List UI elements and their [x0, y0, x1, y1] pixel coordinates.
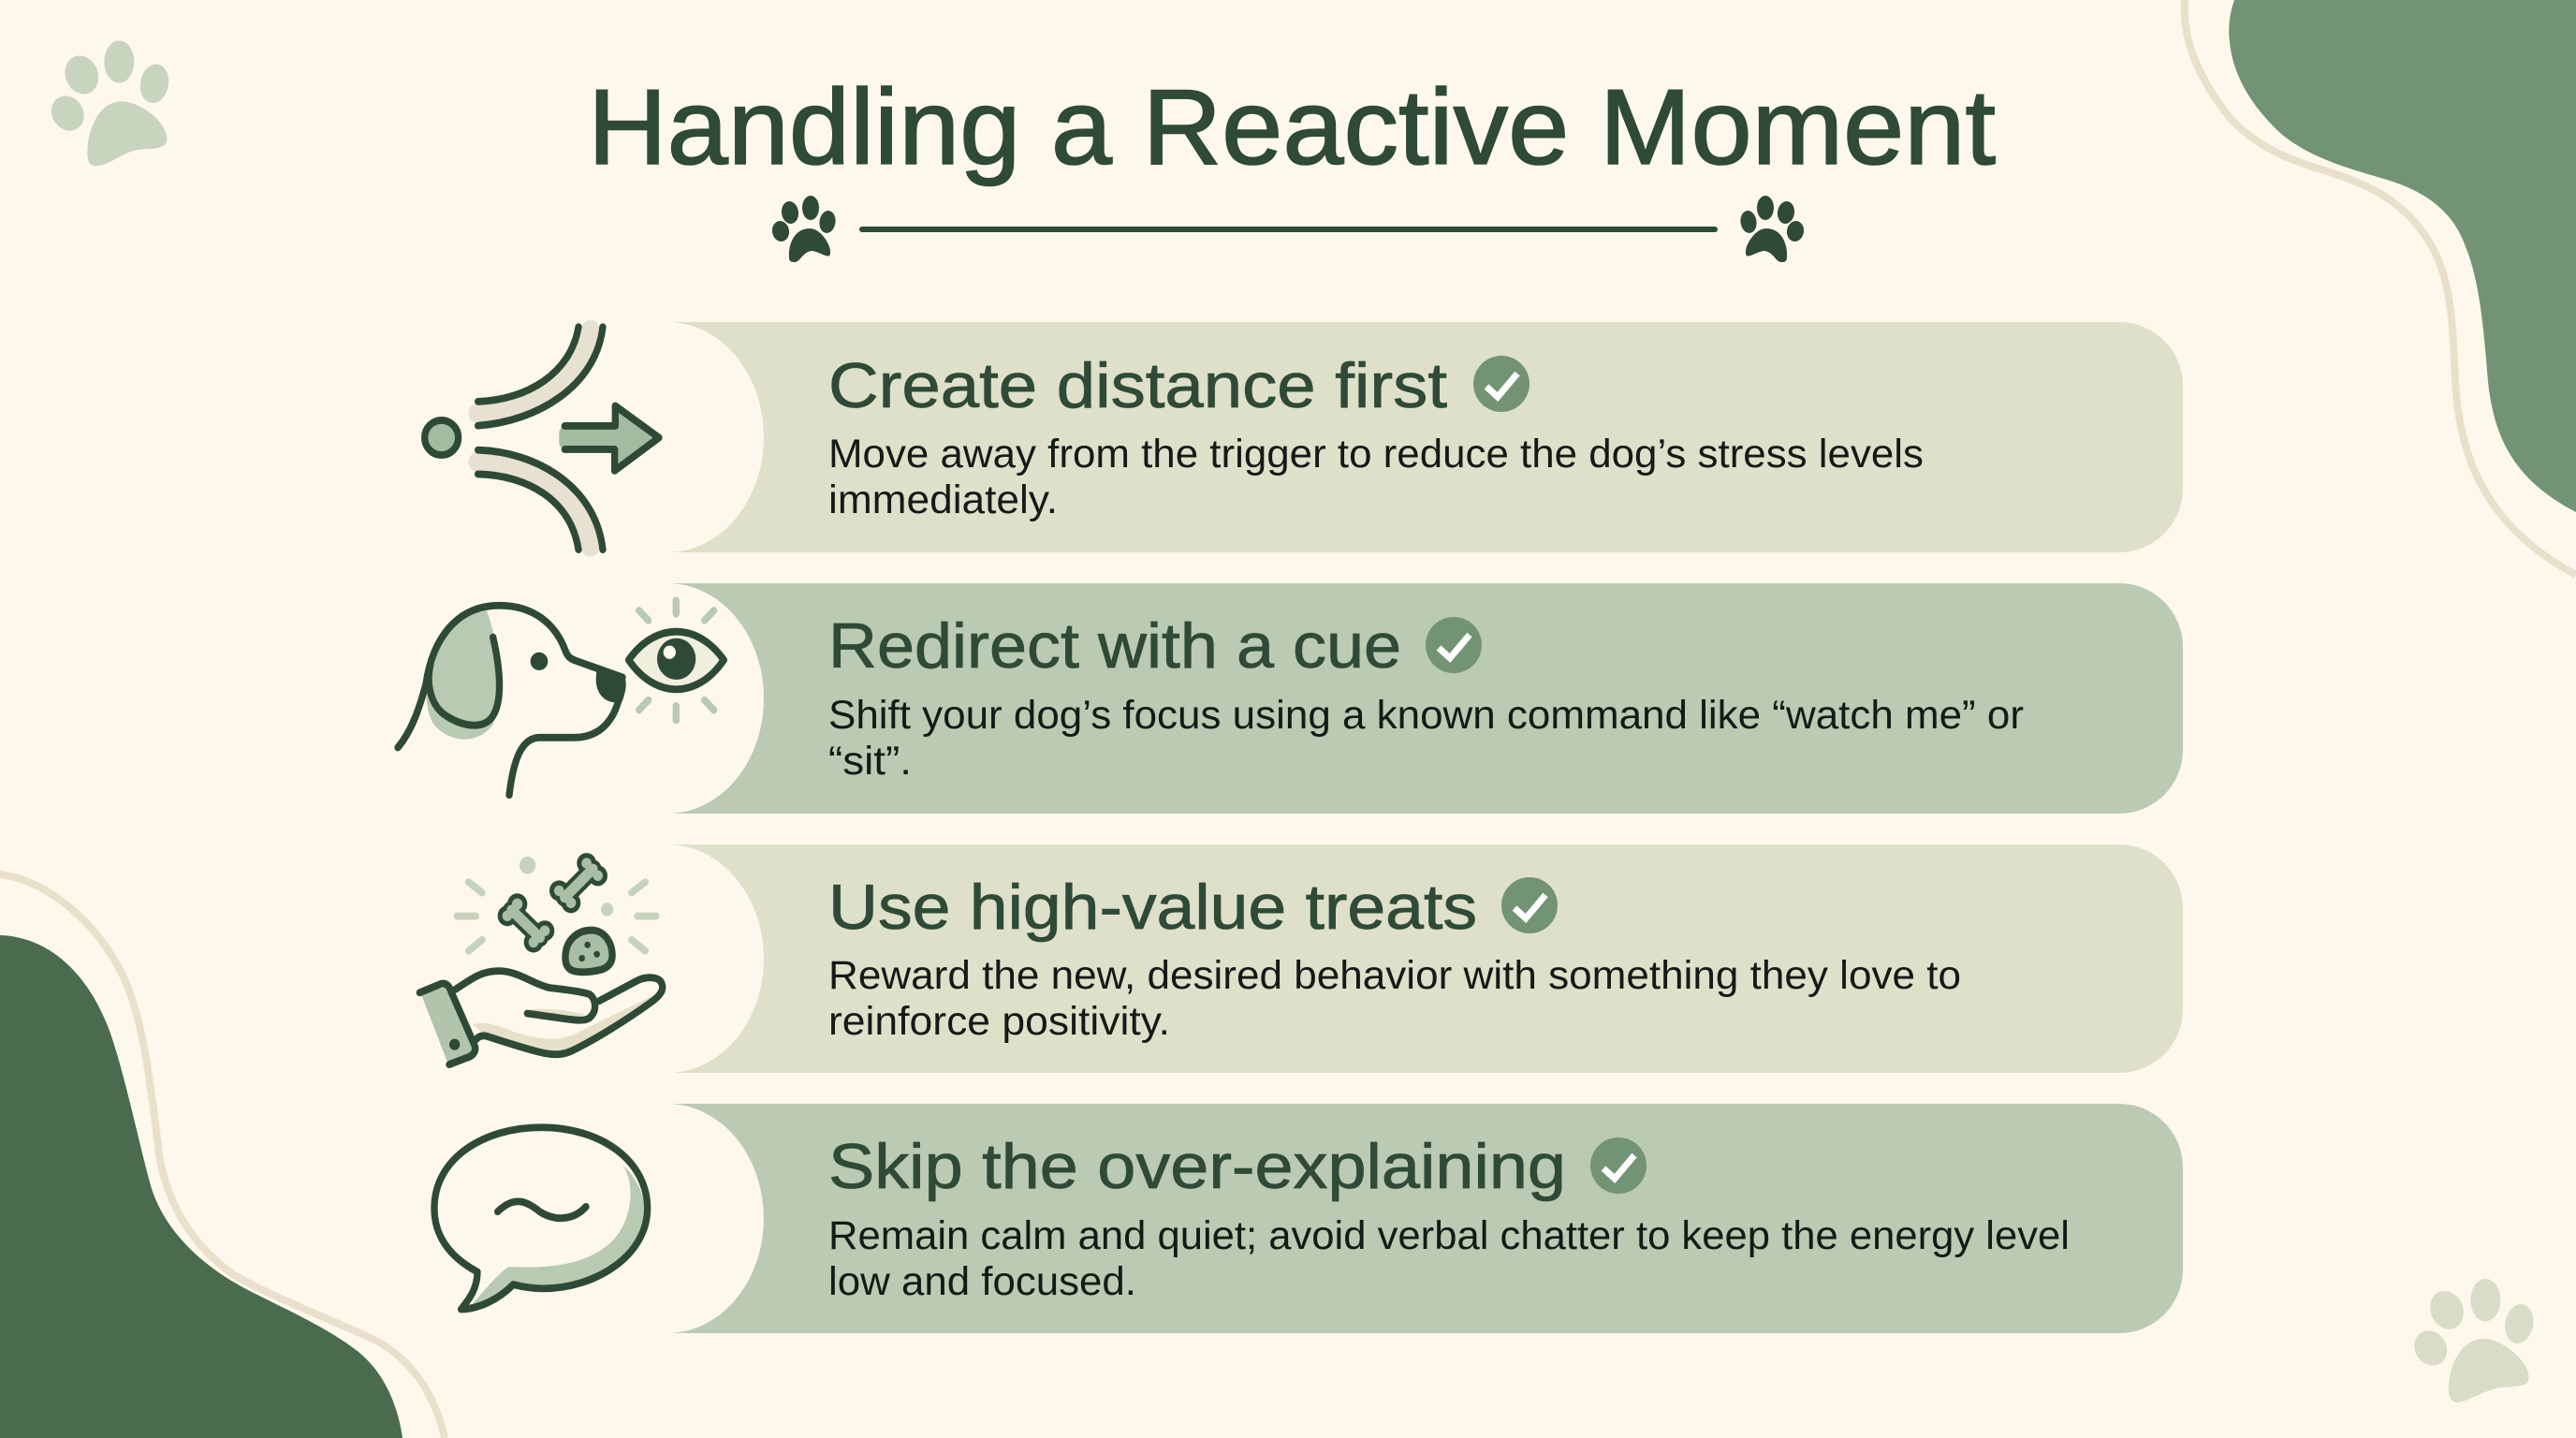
- blob: top right corner: [2185, 0, 2576, 575]
- icon: speech bubble: [434, 1127, 648, 1310]
- icon: moving away arrow: [425, 327, 659, 550]
- heading: Use high-value treats: [828, 872, 1477, 943]
- body text: Reward the new, desired behavior with something they love to: [828, 953, 1961, 998]
- icon: hand with treats: [419, 853, 663, 1064]
- icon: check: [1590, 1137, 1647, 1194]
- panel: skip the over-explaining: [434, 1104, 2183, 1333]
- panel: redirect with a cue: [398, 583, 2183, 814]
- title: Handling a Reactive Moment: [588, 68, 1996, 187]
- icon: check: [1501, 877, 1558, 933]
- panel: create distance first: [425, 322, 2183, 552]
- body text: Remain calm and quiet; avoid verbal chatter to keep the energy level: [828, 1213, 2070, 1258]
- panel: use high-value treats: [419, 844, 2183, 1073]
- body text: immediately.: [828, 477, 1058, 522]
- icon: check: [1473, 356, 1530, 412]
- icon: paw top left: [45, 40, 171, 166]
- heading: Create distance first: [828, 350, 1447, 421]
- body text: low and focused.: [828, 1259, 1136, 1304]
- body text: reinforce positivity.: [828, 999, 1170, 1044]
- icon: paw bottom right: [2408, 1279, 2537, 1402]
- blob: bottom left corner: [0, 874, 445, 1438]
- body text: Shift your dog’s focus using a known command like “watch me” or: [828, 693, 2024, 738]
- icon: check: [1426, 617, 1482, 673]
- title divider with paws: [770, 196, 1806, 262]
- body text: “sit”.: [828, 739, 912, 784]
- heading: Redirect with a cue: [828, 610, 1401, 682]
- heading: Skip the over-explaining: [828, 1131, 1566, 1202]
- body text: Move away from the trigger to reduce the dog’s stress levels: [828, 432, 1924, 477]
- icon: dog and eye: [398, 600, 724, 795]
